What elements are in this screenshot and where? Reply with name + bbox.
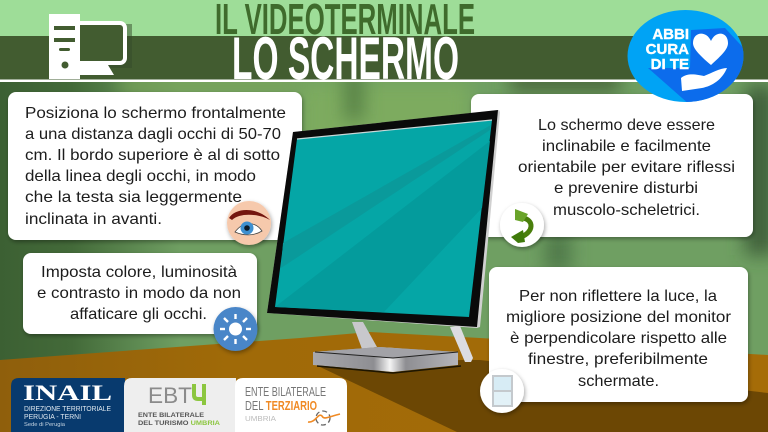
desk shadow xyxy=(318,360,768,432)
panel: screen distance: inclinata in avanti. xyxy=(25,211,162,228)
header band: dark green xyxy=(0,36,768,80)
panel: screen distance: a una distanza dagli occhi di 50-70 xyxy=(25,126,281,143)
panel: tilt and orientation: inclinabile e facilmente xyxy=(542,138,711,155)
logo: EBT4: ENTE BILATERALE xyxy=(138,412,205,419)
logo: INAIL: DIREZIONE TERRITORIALE xyxy=(24,406,111,413)
icon: window xyxy=(480,369,524,413)
logo: INAIL: Sede di Perugia xyxy=(24,422,65,428)
panel: window position: è perpendicolare rispetto alle xyxy=(510,330,727,347)
logo: Ente Bilaterale del Terziario: DEL TERZIARIO xyxy=(245,399,317,413)
panel: window position: finestre, preferibilmente xyxy=(528,351,708,368)
panel: window position: schermate. xyxy=(578,373,659,390)
panel: screen distance xyxy=(8,92,302,245)
monitor stand: left arm xyxy=(352,322,377,349)
icon: eye xyxy=(227,201,271,245)
icon: sun brightness xyxy=(214,307,258,351)
logo: Ente Bilaterale del Terziario: ENTE BILATERALE xyxy=(245,385,326,399)
panel: window position xyxy=(480,267,748,413)
header band: light green xyxy=(0,0,768,36)
panel: tilt and orientation xyxy=(471,94,753,247)
logo: Abbi cura di te xyxy=(628,10,750,105)
panel: window position: Per non riflettere la luce, la xyxy=(519,288,717,305)
logo: EBT4: DEL TURISMO UMBRIA xyxy=(138,420,220,427)
panel: colour and brightness: affaticare gli occhi. xyxy=(70,306,207,323)
panel: screen distance: Posiziona lo schermo frontalmente xyxy=(25,105,286,122)
logo: Ente Bilaterale del Terziario xyxy=(235,378,347,432)
logo: Ente Bilaterale del Terziario: UMBRIA xyxy=(245,416,276,423)
monitor stand: right arm xyxy=(450,326,473,362)
monitor xyxy=(267,110,500,373)
panel: colour and brightness xyxy=(23,253,258,351)
logo: INAIL: INAIL xyxy=(23,380,112,405)
panel: tilt and orientation: e prevenire disturbi xyxy=(554,180,698,197)
panel: screen distance: che la testa sia leggermente xyxy=(25,189,242,206)
panel: tilt and orientation: muscolo-scheletrici. xyxy=(553,202,700,219)
logo: INAIL xyxy=(11,378,125,432)
logo: Abbi cura di te: DI TE xyxy=(651,56,689,73)
panel: window position: migliore posizione del monitor xyxy=(506,309,732,326)
logo: Abbi cura di te: ABBI xyxy=(652,26,689,43)
panel: tilt and orientation: Lo schermo deve essere xyxy=(538,117,715,134)
icon: desktop computer xyxy=(49,14,132,79)
panel: screen distance: cm. Il bordo superiore è al di sotto xyxy=(25,147,280,164)
panel: colour and brightness: e contrasto in modo da non xyxy=(37,285,241,302)
title xyxy=(215,0,475,92)
monitor screen xyxy=(275,120,492,317)
monitor base xyxy=(313,347,461,373)
panel: screen distance: della linea degli occhi, in modo xyxy=(25,168,256,185)
logo: INAIL: PERUGIA - TERNI xyxy=(24,414,81,421)
panel: tilt and orientation: orientabile per evitare riflessi xyxy=(518,159,735,176)
logo: Abbi cura di te: CURA xyxy=(646,41,689,58)
panel: colour and brightness: Imposta colore, luminosità xyxy=(41,264,237,281)
logo: EBT4 xyxy=(124,378,236,432)
icon: rotate arrows xyxy=(500,203,544,247)
wooden desk xyxy=(0,332,768,432)
logo: EBT4: EBT xyxy=(148,383,192,408)
title: LO SCHERMO xyxy=(232,25,459,92)
monitor frame xyxy=(267,110,500,328)
